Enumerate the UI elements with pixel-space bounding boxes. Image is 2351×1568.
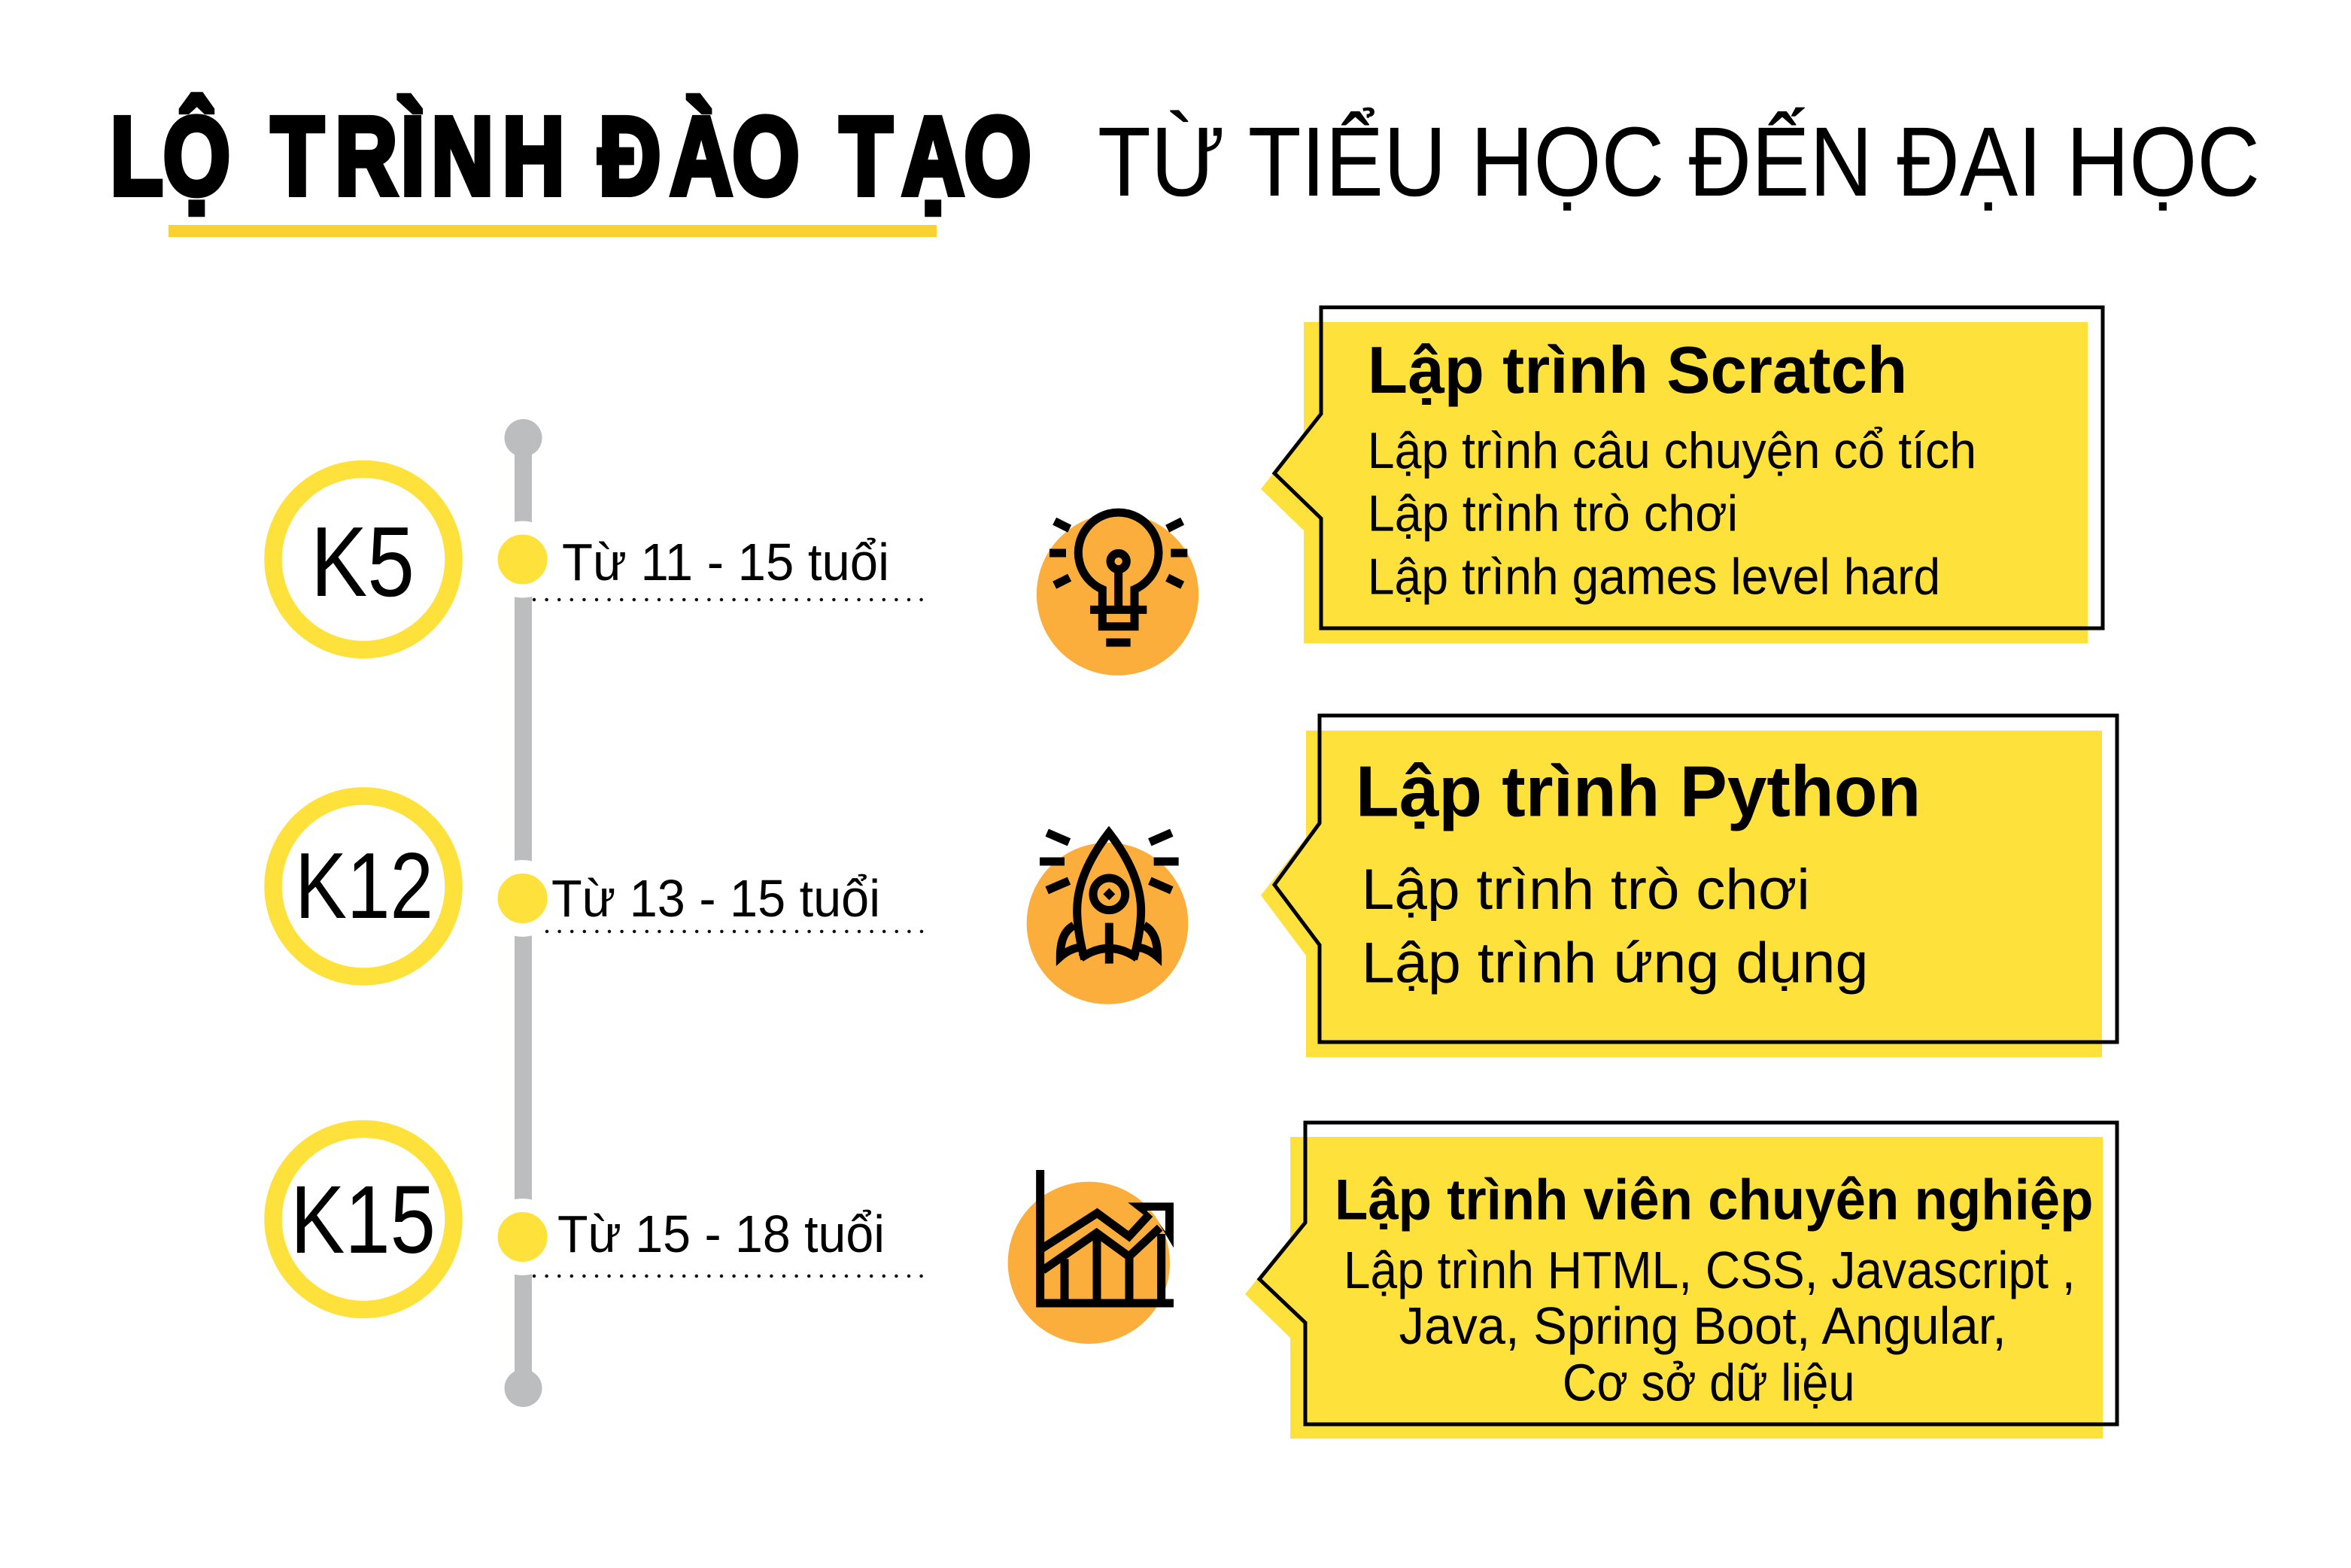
panel heading: Lập trình viên chuyên nghiệp: [1335, 1168, 2094, 1232]
panel: professional developer: [1245, 1123, 2117, 1439]
panel fill: [1261, 322, 2088, 643]
timeline dot K15: [491, 1205, 554, 1269]
panel list: Cơ sở dữ liệu: [1563, 1354, 1855, 1412]
timeline: [491, 419, 554, 1407]
panel list: Java, Spring Boot, Angular,: [1399, 1296, 2006, 1355]
panel list: Lập trình HTML, CSS, Javascript ,: [1344, 1241, 2076, 1299]
panel heading: Lập trình Python: [1356, 751, 1921, 831]
panel text: [1356, 751, 1921, 995]
panel list: [1362, 858, 1869, 995]
title: [111, 94, 2260, 237]
panel list: [1368, 423, 1976, 605]
icon: light bulb: [1037, 512, 1198, 676]
panel text: [1368, 333, 1976, 605]
badge: K5: [273, 469, 454, 650]
badge: K12: [273, 796, 454, 977]
age label K5: Từ 11 - 15 tuổi: [562, 533, 889, 591]
panel list: [1344, 1241, 2076, 1412]
heading: main title: LỘ TRÌNH ĐÀO TẠO: [111, 94, 1031, 217]
title underline: [169, 225, 937, 237]
age label K12: Từ 13 - 15 tuổi: [551, 869, 880, 928]
panel outline: [1274, 307, 2103, 628]
timeline end cap: [504, 1369, 542, 1407]
panel heading: Lập trình Scratch: [1368, 333, 1907, 407]
panel: Python: [1261, 716, 2117, 1057]
panel: Scratch: [1261, 307, 2103, 643]
badge: K15: [273, 1129, 454, 1309]
age label K15: Từ 15 - 18 tuổi: [557, 1205, 885, 1263]
badge: K12: K12: [295, 834, 433, 938]
panel outline: [1274, 716, 2117, 1042]
icon: rocket: [1027, 833, 1188, 1004]
panel text: [1335, 1168, 2094, 1412]
badge: K5: K5: [311, 506, 415, 617]
timeline start cap: [504, 419, 542, 457]
panel outline: [1259, 1123, 2117, 1424]
panel list: Lập trình ứng dụng: [1362, 931, 1869, 995]
timeline dot K12: [491, 867, 554, 930]
timeline bar: [515, 438, 532, 1387]
panel list: Lập trình trò chơi: [1368, 486, 1738, 542]
icon: growth chart: [1008, 1170, 1174, 1344]
panel list: Lập trình trò chơi: [1362, 858, 1810, 922]
badge: K15: K15: [290, 1166, 436, 1274]
timeline dot K5: [491, 528, 554, 591]
panel fill: [1245, 1137, 2103, 1439]
panel list: Lập trình games level hard: [1368, 548, 1940, 605]
panel list: Lập trình câu chuyện cổ tích: [1368, 423, 1976, 479]
panel fill: [1261, 731, 2102, 1057]
